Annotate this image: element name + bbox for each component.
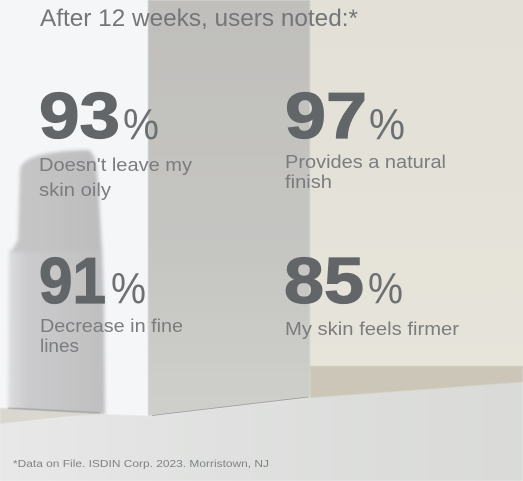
floor strip left — [0, 408, 100, 424]
stat: 93%: Doesn't leave my — [39, 155, 192, 175]
cast shadow of bottle — [8, 150, 105, 415]
stat: 85%: My skin feels firmer — [285, 319, 459, 339]
stat: 91%: Decrease in fine — [40, 316, 183, 336]
stat: 91% — [39, 244, 183, 356]
stat: 97%: 97 — [285, 79, 367, 152]
stat: 85%: 85 — [284, 244, 364, 317]
stat: 91%: % — [111, 264, 146, 313]
stat: 93% — [39, 79, 192, 200]
stat: 93%: skin oily — [39, 180, 111, 200]
stat: 85%: % — [368, 264, 403, 313]
stat: 93%: % — [123, 100, 159, 149]
stat: 93%: 93 — [39, 79, 120, 152]
floor — [0, 382, 523, 481]
stat: 85% — [284, 244, 459, 339]
stat: 97%: finish — [285, 172, 332, 192]
stat: 97%: % — [369, 100, 405, 149]
stat: 91%: lines — [40, 336, 79, 356]
title: After 12 weeks, users noted:* — [40, 5, 358, 32]
footnote: *Data on File. ISDIN Corp. 2023. Morristown, NJ — [13, 458, 269, 470]
gray block face — [148, 0, 310, 416]
beige band — [310, 366, 523, 402]
stat: 97%: Provides a natural — [285, 152, 446, 172]
stat: 97% — [285, 79, 446, 192]
stat: 91%: 91 — [39, 244, 106, 317]
right wall — [310, 0, 523, 370]
